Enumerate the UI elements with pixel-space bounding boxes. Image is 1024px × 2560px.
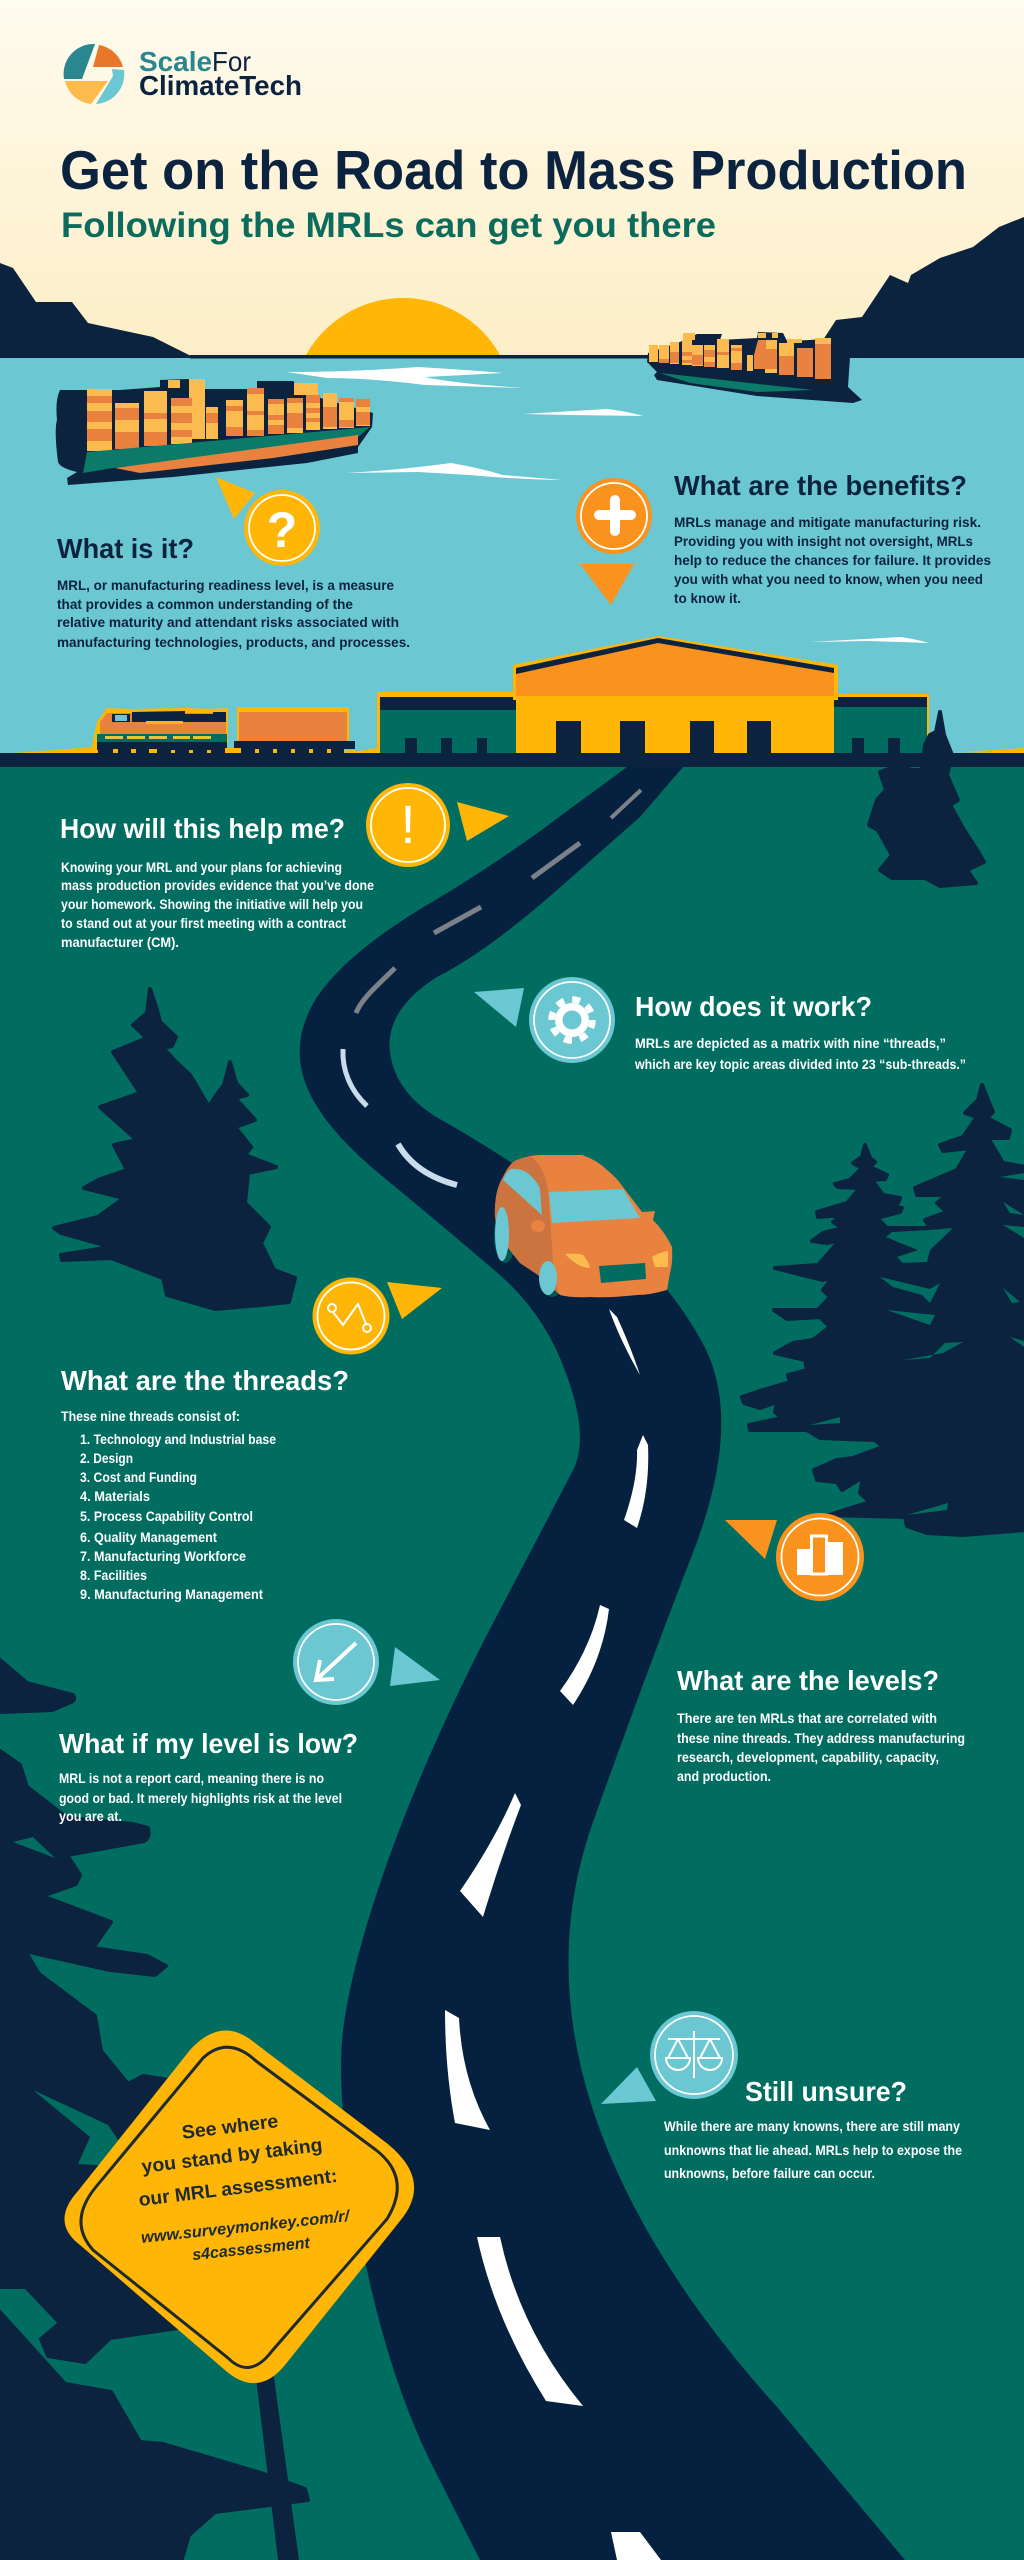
- panel: how will this help me: [60, 783, 509, 950]
- sign text: s4cassessment: [191, 2235, 311, 2264]
- body text: these nine threads. They address manufacturing: [677, 1730, 965, 1746]
- body text: unknowns that lie ahead. MRLs help to expose the: [664, 2142, 962, 2158]
- hull stripe: [83, 427, 370, 473]
- freight car deck: [234, 741, 355, 749]
- body text: MRLs are depicted as a matrix with nine “threads,”: [635, 1035, 946, 1051]
- factory: [377, 636, 929, 754]
- thread list: 9. Manufacturing Management: [80, 1586, 263, 1602]
- body text: you are at.: [59, 1808, 122, 1824]
- body text: [634, 1035, 966, 1072]
- horizon line: [190, 355, 660, 358]
- highlight 2: [523, 409, 643, 416]
- license plate: [599, 1263, 646, 1283]
- sign face: [64, 2031, 414, 2383]
- rail band: [0, 753, 1024, 767]
- heading: What are the benefits?: [674, 470, 967, 501]
- highlight 4: [810, 637, 929, 643]
- pale dash 1: [343, 1049, 367, 1106]
- branch gap: [13, 1837, 55, 1858]
- faded dash 3: [434, 907, 481, 933]
- lower gap: [33, 2090, 125, 2166]
- highlight 1: [287, 367, 523, 388]
- thread list: 1. Technology and Industrial base: [80, 1431, 276, 1447]
- logo wordmark: For: [212, 46, 251, 77]
- locomotive top: [132, 711, 226, 722]
- body text: [59, 1770, 342, 1824]
- sign post: [255, 2370, 299, 2560]
- far container ship: [647, 332, 862, 403]
- road: [300, 767, 905, 2560]
- right mountain: [800, 217, 1024, 360]
- hull silhouette: [56, 379, 373, 485]
- roof strip: [516, 638, 834, 674]
- heading: How does it work?: [635, 991, 872, 1022]
- panel: what is it: [57, 477, 410, 650]
- panel: low level: [59, 1619, 440, 1824]
- ground glow strips: [0, 747, 1024, 754]
- intro text: These nine threads consist of:: [61, 1408, 240, 1424]
- thread list: 7. Manufacturing Workforce: [80, 1548, 246, 1564]
- body text: manufacturer (CM).: [61, 934, 179, 950]
- water highlights: [287, 367, 929, 643]
- lower mass: [0, 2310, 308, 2560]
- car: [494, 1155, 672, 1297]
- logo: [64, 44, 302, 104]
- lane markings: [343, 790, 661, 2560]
- icon: plus: [576, 478, 652, 605]
- heading: How will this help me?: [60, 813, 345, 844]
- heading: What are the levels?: [677, 1665, 939, 1696]
- body text: unknowns, before failure can occur.: [664, 2165, 875, 2181]
- side mirror: [531, 1220, 545, 1232]
- subtitle: Following the MRLs can get you there: [61, 206, 716, 245]
- left wing: [377, 692, 517, 754]
- wheels: [90, 748, 355, 754]
- containers: [649, 333, 831, 375]
- body text: mass production provides evidence that you’ve done: [61, 877, 374, 893]
- icon: bars: [725, 1513, 864, 1601]
- icon: down arrow: [293, 1619, 440, 1705]
- thread list: 5. Process Capability Control: [80, 1508, 253, 1524]
- body text: your homework. Showing the initiative will help you: [61, 896, 363, 912]
- faded dash 4: [356, 968, 395, 1013]
- thread list: 3. Cost and Funding: [80, 1469, 197, 1485]
- foreground tree left: [0, 1660, 308, 2560]
- right wing: [834, 694, 929, 754]
- body text: to know it.: [674, 590, 741, 606]
- left mountain: [0, 263, 193, 360]
- far wheel: [494, 1209, 516, 1263]
- locomotive body: [100, 713, 226, 734]
- icon: scales: [601, 2011, 738, 2104]
- left headlight: [565, 1254, 590, 1268]
- heading: What is it?: [57, 533, 194, 564]
- faded dash 2: [532, 843, 580, 878]
- near container ship: [56, 379, 373, 485]
- locomotive chassis: [97, 742, 227, 754]
- tree silhouette: [742, 1085, 1024, 1535]
- white dashes: [445, 1309, 661, 2560]
- title: Get on the Road to Mass Production: [60, 139, 967, 201]
- teal band: [97, 734, 227, 742]
- sign border: [81, 2047, 397, 2367]
- icon: question mark: [216, 477, 320, 566]
- sky background: [0, 0, 1024, 360]
- body text: [677, 1710, 965, 1784]
- body text: Providing you with insight not oversight, MRLs: [674, 533, 973, 549]
- logo wordmark: [139, 46, 302, 101]
- water: [0, 358, 1024, 758]
- thread list: 4. Materials: [80, 1488, 150, 1504]
- sign text: www.surveymonkey.com/r/: [140, 2208, 351, 2247]
- hull silhouette: [647, 332, 862, 403]
- body text: research, development, capability, capacity,: [677, 1749, 939, 1765]
- panel: levels: [677, 1513, 965, 1784]
- body text: [664, 2118, 962, 2181]
- sign text: our MRL assessment:: [138, 2166, 339, 2211]
- body text: [57, 577, 410, 650]
- thread list: [80, 1431, 276, 1602]
- body text: to stand out at your first meeting with a contract: [61, 915, 346, 931]
- panel: threads: [61, 1278, 442, 1602]
- yellow stripe: [146, 721, 183, 724]
- body text: that provides a common understanding of the: [57, 596, 353, 612]
- main hall: [516, 696, 834, 754]
- near wheel shadow: [541, 1261, 563, 1297]
- road sign: [64, 2031, 414, 2560]
- body text: manufacturing technologies, products, and processes.: [57, 634, 410, 650]
- sign text: [138, 2111, 351, 2264]
- heading: What are the threads?: [61, 1365, 349, 1396]
- body text: which are key topic areas divided into 23 “sub-threads.”: [634, 1056, 966, 1072]
- body text: help to reduce the chances for failure. It provides: [674, 552, 991, 568]
- body text: you with what you need to know, when you need: [674, 571, 983, 587]
- hull underside: [115, 435, 358, 473]
- freight train: [90, 707, 355, 754]
- side dashes: [105, 736, 211, 739]
- body text: There are ten MRLs that are correlated with: [677, 1710, 937, 1726]
- icon: thread line: [312, 1278, 442, 1354]
- loading doors: [556, 721, 771, 754]
- icon: exclamation: [366, 783, 509, 867]
- body text: MRLs manage and mitigate manufacturing risk.: [674, 514, 981, 530]
- heading: What if my level is low?: [59, 1728, 358, 1759]
- trees near factory: [869, 712, 984, 886]
- body text: relative maturity and attendant risks associated with: [57, 614, 399, 630]
- body: [495, 1155, 672, 1297]
- body text: Knowing your MRL and your plans for achieving: [61, 859, 342, 875]
- body text: good or bad. It merely highlights risk at the level: [59, 1790, 342, 1806]
- body text: MRL is not a report card, meaning there is no: [59, 1770, 324, 1786]
- body text: MRL, or manufacturing readiness level, is a measure: [57, 577, 394, 593]
- hull stripe: [660, 373, 813, 392]
- main trunk mass: [0, 1751, 260, 2362]
- roof outline: [513, 636, 838, 700]
- thread list: 2. Design: [80, 1450, 133, 1466]
- ground: [0, 766, 1024, 2560]
- freight car outline: [237, 707, 349, 743]
- cab window: [112, 714, 130, 722]
- faded dash 1: [611, 790, 641, 818]
- wheels: [495, 1207, 509, 1261]
- logo mark: [64, 44, 124, 104]
- body text: [674, 514, 991, 606]
- main roof: [516, 638, 834, 696]
- sun: [306, 298, 500, 355]
- freight car box: [239, 712, 347, 742]
- body text: and production.: [677, 1768, 771, 1784]
- side window: [503, 1169, 542, 1215]
- top branch: [0, 1660, 74, 1712]
- trees right of road: [742, 1085, 1024, 1535]
- panel: still unsure: [601, 2011, 962, 2181]
- windshield: [549, 1189, 640, 1223]
- highlight 3: [346, 463, 562, 480]
- pale dash 2: [398, 1144, 457, 1185]
- heading: Still unsure?: [745, 2076, 907, 2107]
- thread list: 6. Quality Management: [80, 1529, 217, 1545]
- panel: benefits: [576, 470, 991, 606]
- thread list: 8. Facilities: [80, 1567, 147, 1583]
- trees left of road: [54, 989, 295, 1309]
- icon: question mark: ?: [267, 502, 297, 558]
- branch gaps: [810, 1173, 1024, 1515]
- sign text: See where: [181, 2111, 279, 2144]
- containers: [87, 379, 370, 451]
- sign text: you stand by taking: [140, 2135, 324, 2178]
- icon: exclamation: !: [400, 795, 416, 855]
- logo wordmark: Scale: [139, 46, 212, 77]
- locomotive outline: [90, 708, 228, 754]
- body text: While there are many knowns, there are still many: [664, 2118, 960, 2134]
- panel: how does it work: [474, 977, 966, 1072]
- logo wordmark: ClimateTech: [139, 70, 302, 101]
- icon: gear: [474, 977, 615, 1063]
- shaded side: [495, 1157, 558, 1293]
- body text: [61, 859, 374, 950]
- right headlight: [652, 1251, 668, 1267]
